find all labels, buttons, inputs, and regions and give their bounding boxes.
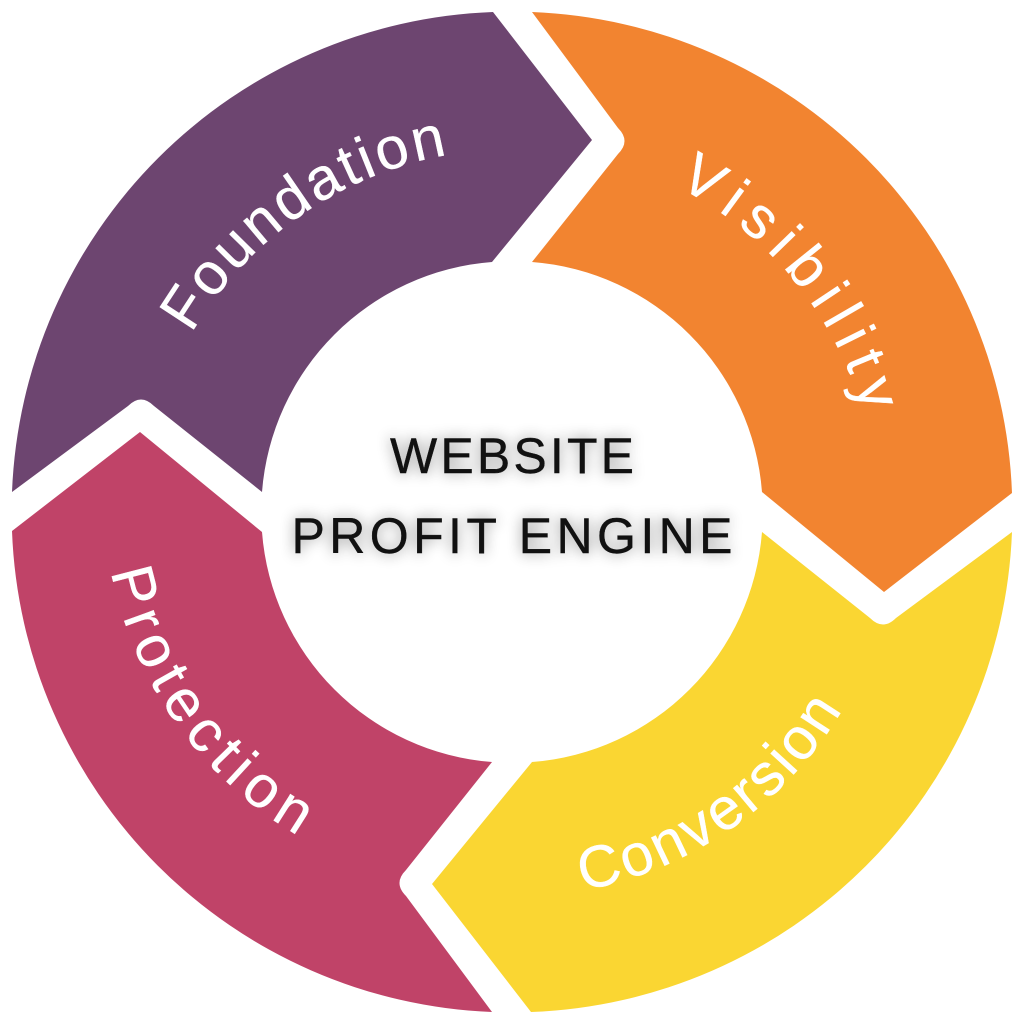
segment: Conversion [432,532,1012,1012]
center title: WEBSITE [390,428,634,484]
label: Visibility: Visibility [691,150,894,404]
label: Foundation: Foundation [160,126,444,330]
center title: PROFIT ENGINE [292,508,732,564]
segment: Protection [12,432,492,1012]
segment: Visibility [532,12,1012,592]
center title [292,428,732,564]
segment: Foundation [12,12,592,492]
label: Conversion: Conversion [580,699,841,888]
label: Protection: Protection [112,566,309,834]
